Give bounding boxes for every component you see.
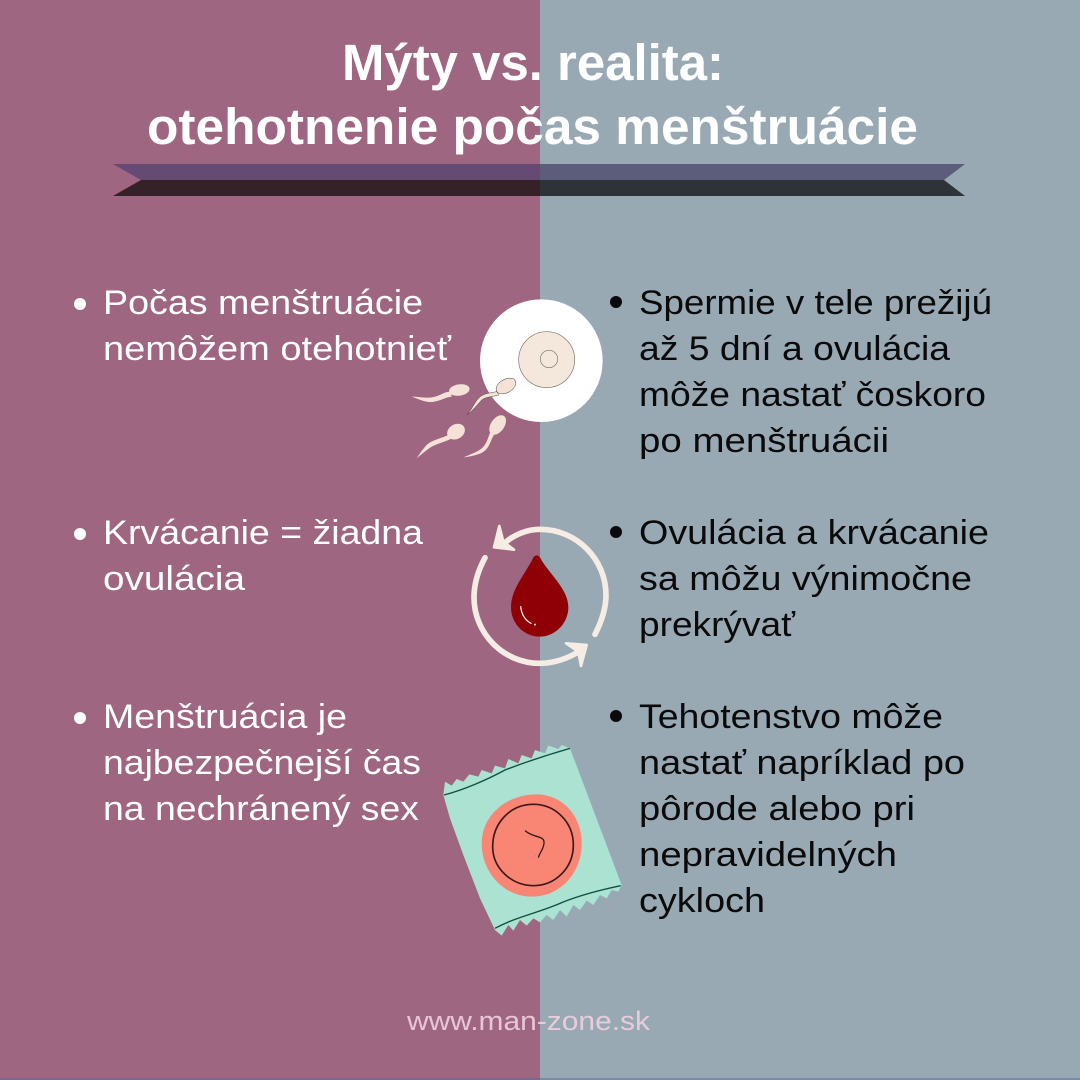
fact 3: nastať napríklad po [639,744,965,782]
cycle arrows [474,529,606,663]
fact 1: Spermie v tele prežijú [639,284,992,322]
fact 2: prekrývať [639,606,796,644]
sperm entering egg [467,375,519,415]
myth 1: Počas menštruácie [103,284,423,322]
blood drop [511,555,568,637]
fact 3: Tehotenstvo môže [639,698,943,736]
left background panel [0,0,540,1080]
fact 1: môže nastať čoskoro [639,376,986,414]
condom ring [482,794,582,897]
title ribbon [113,164,965,196]
icon: egg and sperm [412,299,603,458]
condom tip [525,831,544,858]
myth 3: Menštruácia je [103,698,347,736]
fact 1 [610,284,992,460]
sperm bottom right [463,412,509,458]
myth 3 [74,698,421,828]
sperm left [412,383,470,402]
fact 1: až 5 dní a ovulácia [639,330,950,368]
myth 3: na nechránený sex [103,790,419,828]
myth 1 [74,284,452,368]
myth 2: Krvácanie = žiadna [103,514,423,552]
fact 3 [610,698,965,920]
fact 3: cykloch [639,882,765,920]
title [147,34,918,155]
myth 1: nemôžem otehotnieť [103,330,452,368]
right background panel [540,0,1080,1080]
icon: blood drop in cycle arrows [474,526,606,666]
packet [443,745,622,936]
icon: condom packet [443,745,622,936]
myth 2: ovulácia [103,560,245,598]
fact 2: Ovulácia a krvácanie [639,514,989,552]
fact 2: sa môžu výnimočne [639,560,972,598]
sperm bottom left [417,421,468,458]
myth 3: najbezpečnejší čas [103,744,421,782]
title: Mýty vs. realita: [342,34,724,91]
footer website: www.man-zone.sk [406,1006,651,1036]
fact 2 [610,514,989,644]
fact 1: po menštruácii [639,422,889,460]
packet seam bottom [495,886,621,928]
myth 2 [74,514,423,598]
fact 3: nepravidelných [639,836,897,874]
packet seam top [444,748,570,795]
title: otehotnenie počas menštruácie [147,98,918,155]
drop highlight [521,607,531,623]
fact 3: pôrode alebo pri [639,790,915,828]
